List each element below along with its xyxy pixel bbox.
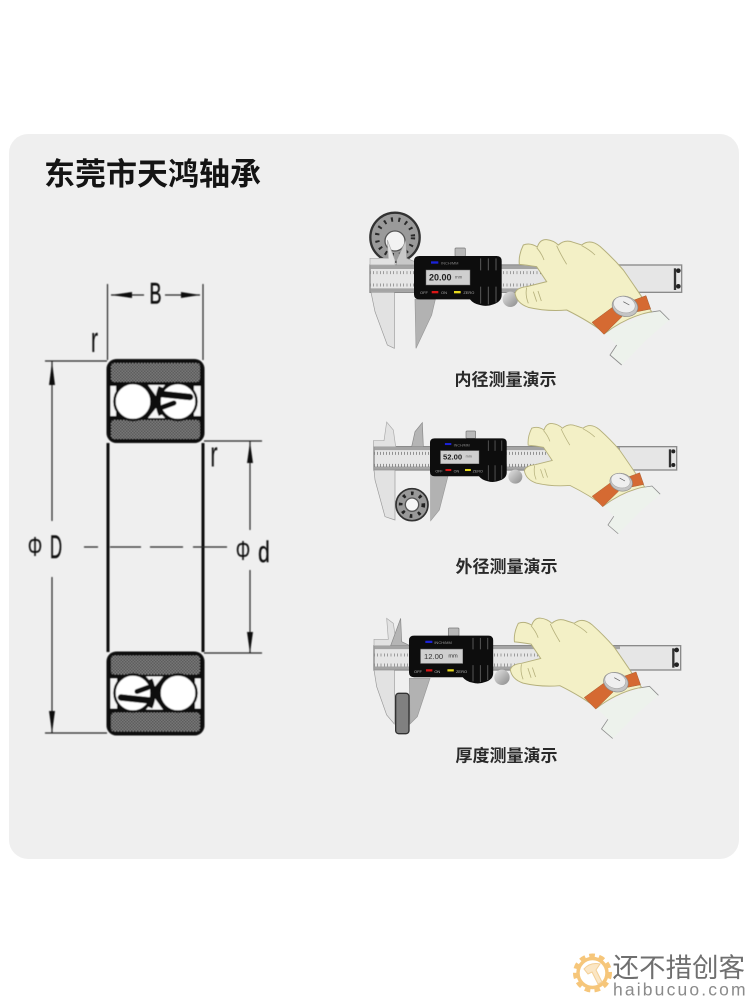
site name: 还不措创客 bbox=[612, 953, 745, 983]
bearing being measured bbox=[370, 213, 420, 262]
caliper with ring bearing: mm bbox=[455, 275, 463, 280]
caliper with round bearing: OFF bbox=[435, 469, 443, 473]
width dimension B bbox=[108, 278, 203, 360]
caliper with ring bearing: INCH/MM bbox=[441, 260, 458, 265]
caliper with round bearing: mm bbox=[466, 455, 472, 459]
caliper with bearing edge: mm bbox=[448, 653, 458, 659]
caliper with ring bearing: 20.00 bbox=[429, 273, 451, 283]
watermark logo bbox=[576, 953, 748, 1000]
caliper with bearing edge: ZERO bbox=[456, 669, 467, 674]
bore diameter dimension d: Φ bbox=[236, 536, 250, 567]
bearing being measured bbox=[396, 693, 409, 734]
caliper with round bearing: ON bbox=[454, 469, 460, 473]
demo: inner diameter measurement bbox=[370, 213, 682, 390]
caliper with ring bearing bbox=[370, 213, 682, 348]
caliper with bearing edge: ON bbox=[434, 669, 440, 674]
caption: 厚度测量演示 bbox=[456, 746, 558, 766]
bore diameter dimension d: d bbox=[258, 537, 270, 569]
radius label r lower: r bbox=[210, 435, 218, 475]
outer diameter dimension D: Φ bbox=[28, 532, 42, 563]
radius label r upper: r bbox=[91, 320, 98, 360]
gloved hand with watch bbox=[510, 618, 658, 739]
bearing bore walls bbox=[108, 443, 203, 652]
bearing dimension diagram bbox=[28, 278, 270, 736]
gloved hand with watch bbox=[524, 423, 660, 534]
outer diameter dimension D bbox=[28, 361, 107, 733]
lower bearing cross-section bbox=[106, 652, 204, 736]
centre line bbox=[84, 546, 227, 548]
caliper with round bearing: ZERO bbox=[473, 469, 483, 473]
outer diameter dimension D: D bbox=[50, 530, 62, 566]
background panel bbox=[9, 134, 739, 859]
icon: gear with hammer bbox=[576, 956, 610, 990]
caliper with bearing edge bbox=[374, 618, 681, 734]
site url: haibucuo.com bbox=[613, 980, 748, 1000]
title: 东莞市天鸿轴承 bbox=[44, 157, 261, 192]
bore diameter dimension d bbox=[204, 441, 270, 653]
caliper with ring bearing: ON bbox=[441, 290, 447, 295]
caliper with round bearing: 52.00 bbox=[443, 453, 462, 462]
demo: thickness measurement bbox=[374, 618, 681, 766]
caliper with ring bearing: OFF bbox=[420, 290, 429, 295]
gloved hand with watch bbox=[515, 240, 669, 365]
caliper with ring bearing: ZERO bbox=[463, 290, 474, 295]
caliper with round bearing: INCH/MM bbox=[454, 443, 470, 447]
upper bearing cross-section bbox=[106, 359, 204, 443]
width dimension B: B bbox=[149, 278, 162, 311]
caliper with bearing edge: 12.00 bbox=[424, 652, 443, 661]
caption: 内径测量演示 bbox=[454, 370, 556, 390]
caliper with bearing edge: OFF bbox=[414, 669, 423, 674]
bearing being measured bbox=[396, 489, 428, 521]
caliper with round bearing bbox=[373, 422, 677, 521]
caliper with bearing edge: INCH/MM bbox=[434, 640, 452, 645]
demo: outer diameter measurement bbox=[373, 422, 677, 576]
caption: 外径测量演示 bbox=[456, 556, 558, 576]
